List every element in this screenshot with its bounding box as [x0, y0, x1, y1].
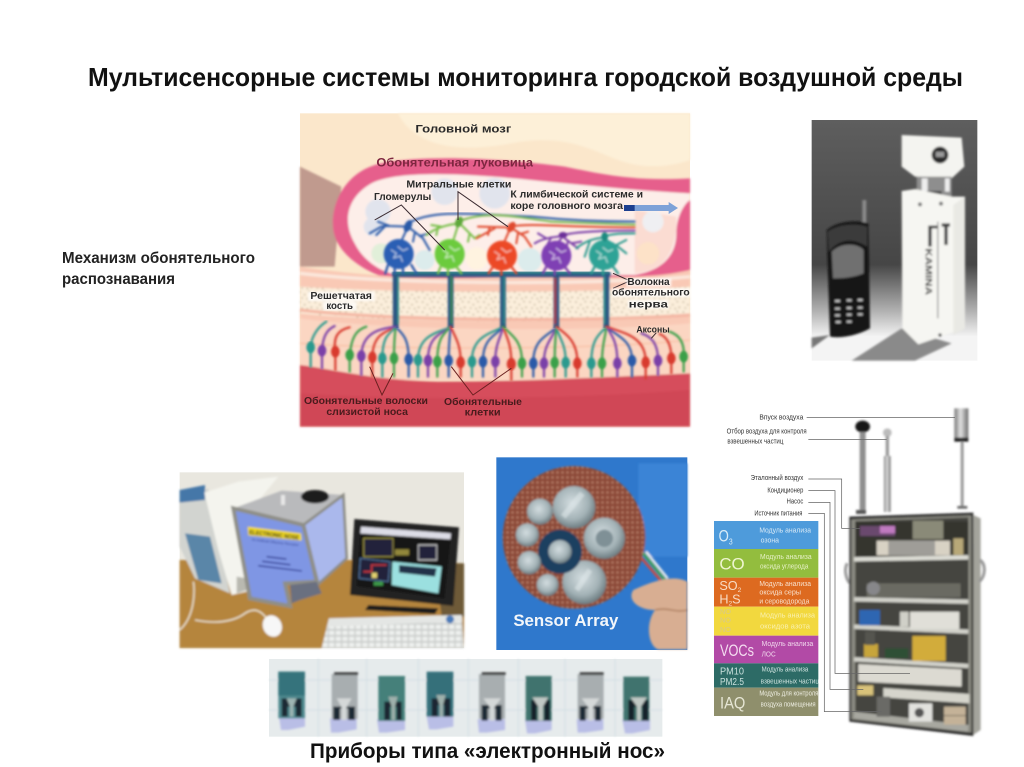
module: particulate matter: PM2.5: [720, 677, 744, 688]
diagram labels: кость: [326, 301, 353, 312]
monitor: [350, 519, 459, 614]
callout labels: Отбор воздуха для контроля: [727, 426, 807, 435]
diagram labels: клетки: [465, 408, 501, 419]
callout labels: Эталонный воздух: [751, 473, 803, 482]
diagram labels: Гломерулы: [374, 192, 431, 203]
callout labels: Источник питания: [754, 509, 802, 518]
module: VOCs: [714, 636, 818, 663]
white sensor box: KAMINA: [924, 248, 934, 295]
receptor cell bodies: [306, 342, 688, 370]
photo: electronic nose lab setup: [180, 472, 464, 648]
module: ozone: озона: [761, 535, 780, 544]
photo: sensor array: [496, 457, 687, 650]
module: nitrogen oxides: NO: [720, 616, 731, 625]
module: VOCs: VOCs: [720, 641, 754, 660]
olfactory receptor neurons: [311, 322, 684, 380]
diagram labels: Обонятельная луковица: [376, 156, 533, 170]
module: carbon monoxide: оксида углерода: [760, 561, 809, 570]
module: ozone: [714, 521, 818, 549]
module: carbon monoxide: CO: [719, 554, 745, 573]
chip 3: [377, 676, 405, 733]
diagram labels: Митральные клетки: [406, 179, 511, 190]
module: carbon monoxide: Модуль анализа: [760, 552, 813, 561]
module: particulate matter: PM10: [720, 666, 744, 677]
panel: olfactory system diagram: [300, 113, 691, 427]
diagram labels: Решетчатая: [310, 291, 372, 302]
text block: olfactory recognition mechanism: [62, 250, 255, 288]
title: Мультисенсорные системы мониторинга городской воздушной среды: [88, 62, 963, 92]
mouse and cable: [180, 582, 285, 640]
text block: olfactory recognition mechanism: распознавания: [62, 271, 175, 288]
text block: olfactory recognition mechanism: Механизм обонятельного: [62, 250, 255, 267]
wires: [643, 553, 665, 580]
caption: electronic nose devices: Приборы типа «электронный нос»: [310, 740, 665, 763]
chip 5: [478, 672, 506, 733]
chip 4: [427, 672, 453, 729]
module: ozone: Модуль анализа: [759, 525, 812, 534]
module: nitrogen oxides: [714, 607, 818, 636]
sensors: [553, 486, 595, 529]
module: sulfur oxide and hydrogen sulfide: 2: [738, 587, 742, 594]
callout labels: взвешенных частиц: [727, 436, 784, 445]
module: indoor air quality: Модуль для контроля: [759, 691, 819, 698]
white sensor box: [902, 135, 965, 344]
chip 6: [525, 676, 552, 733]
module: carbon monoxide: [714, 549, 818, 578]
module: ozone: 3: [729, 537, 733, 547]
callout labels: Впуск воздуха: [759, 412, 804, 421]
module: sulfur oxide and hydrogen sulfide: SO: [719, 579, 738, 593]
module: particulate matter: [714, 663, 820, 688]
sensor array caption: Sensor Array: [513, 611, 619, 630]
nerve fibers: olfactory bundle: [395, 273, 608, 327]
leader lines: [370, 192, 656, 395]
equipment cabinet: [846, 513, 984, 736]
chip 1: [278, 672, 305, 730]
chip 2: [330, 672, 358, 733]
module: particulate matter: Модуль анализа: [762, 665, 809, 674]
module: indoor air quality: воздуха помещения: [761, 702, 816, 709]
callout lines: [807, 417, 955, 712]
module: VOCs: Модуль анализа: [762, 639, 814, 648]
fingers: [631, 578, 687, 649]
module: sulfur oxide and hydrogen sulfide: H: [719, 592, 728, 606]
photo: row of sensor chips: [269, 659, 662, 737]
purple neuron: [535, 233, 581, 275]
module: indoor air quality: IAQ: [720, 693, 745, 712]
diagram tissue background: [300, 113, 690, 427]
module: indoor air quality: [714, 688, 819, 716]
diagram labels: Обонятельные волоски: [304, 395, 428, 407]
module: sulfur oxide and hydrogen sulfide: S: [732, 592, 741, 606]
keyboard: [322, 615, 464, 648]
chip 8: [622, 677, 650, 733]
module: particulate matter: взвешенных частиц: [761, 676, 820, 685]
module: nitrogen oxides: Модуль анализа: [760, 610, 816, 619]
green neuron: [426, 223, 480, 275]
module: sulfur oxide and hydrogen sulfide: [714, 578, 818, 607]
inlet rods: [855, 408, 968, 514]
diagram labels: К лимбической системе и: [510, 190, 643, 201]
module: nitrogen oxides: оксидов азота: [760, 621, 811, 630]
diagram labels: Волокна: [627, 277, 670, 288]
module: nitrogen oxides: NO: [720, 607, 731, 616]
e-nose box: [233, 490, 347, 606]
diagram labels: слизистой носа: [326, 407, 408, 418]
module: nitrogen oxides: NO: [720, 625, 731, 634]
module: sulfur oxide and hydrogen sulfide: и сероводорода: [759, 598, 809, 605]
arrow: to limbic system: [624, 202, 678, 214]
module: ozone: O: [719, 526, 732, 545]
teal neuron: [576, 237, 626, 275]
module: sulfur oxide and hydrogen sulfide: Модуль анализа: [759, 581, 811, 588]
e-nose box: An Artificial Olfactory Receptor: [252, 538, 300, 547]
diagram labels: Аксоны: [636, 325, 670, 335]
legend: analysis modules: [714, 521, 820, 716]
blue neuron: [370, 222, 430, 273]
diagram labels: Обонятельные: [444, 396, 522, 408]
e-nose box: ELECTRONIC NOSE: [249, 530, 299, 542]
mitral axons: [408, 214, 635, 237]
callout labels: Насос: [787, 496, 803, 505]
label halos: [308, 278, 691, 310]
callout labels: [727, 412, 807, 518]
diagram labels: коре головного мозга: [510, 201, 624, 212]
callout labels: Кондиционер: [767, 486, 803, 495]
glomerulus squiggles: [391, 247, 613, 263]
glomeruli and mitral cells: [370, 214, 635, 275]
module: sulfur oxide and hydrogen sulfide: оксида серы: [759, 590, 801, 597]
computer tower: [180, 477, 278, 595]
diagram labels: обонятельного: [612, 287, 690, 299]
phone: [827, 200, 870, 337]
diagram labels: нерва: [629, 299, 669, 310]
module: VOCs: ЛОС: [762, 650, 776, 659]
diagram labels: [304, 124, 690, 419]
photo: air monitoring station: [714, 408, 984, 736]
chip 7: [577, 672, 604, 733]
diagram labels: Головной мозг: [415, 124, 512, 136]
red neuron: [476, 227, 531, 275]
photo: Kamina device and mobile phone: [812, 120, 977, 361]
module: sulfur oxide and hydrogen sulfide: 2: [728, 600, 732, 607]
